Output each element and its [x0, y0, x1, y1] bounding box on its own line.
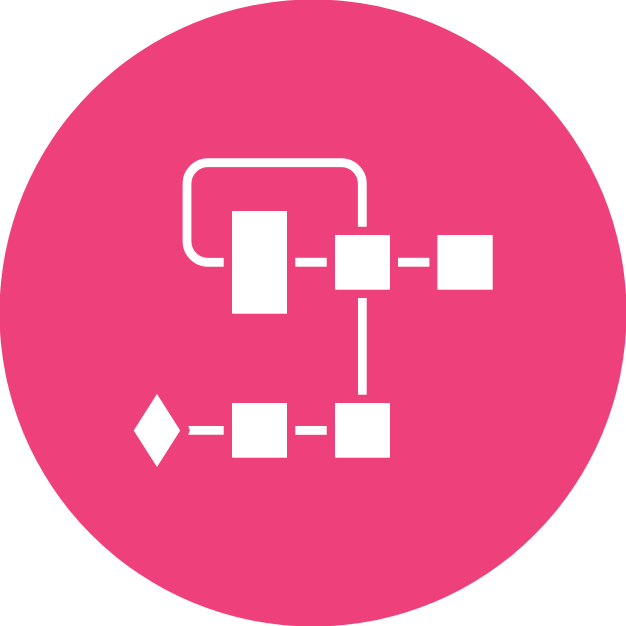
decision diamond: [134, 394, 180, 467]
bottom middle process square: [232, 403, 287, 458]
arrow: feedback loop connector: [187, 163, 362, 262]
bottom right process square: [335, 403, 390, 458]
connector: diamond to bottom square: [188, 426, 224, 435]
connector: bottom squares: [295, 426, 327, 435]
vertical connector: [358, 298, 367, 395]
flowchart diagram: [134, 163, 493, 467]
top right process square: [437, 235, 493, 290]
tall process block: [232, 211, 287, 314]
connector: tall block to middle square: [295, 258, 327, 267]
connector: middle square to right square: [398, 258, 429, 267]
top middle process square: [335, 235, 390, 290]
